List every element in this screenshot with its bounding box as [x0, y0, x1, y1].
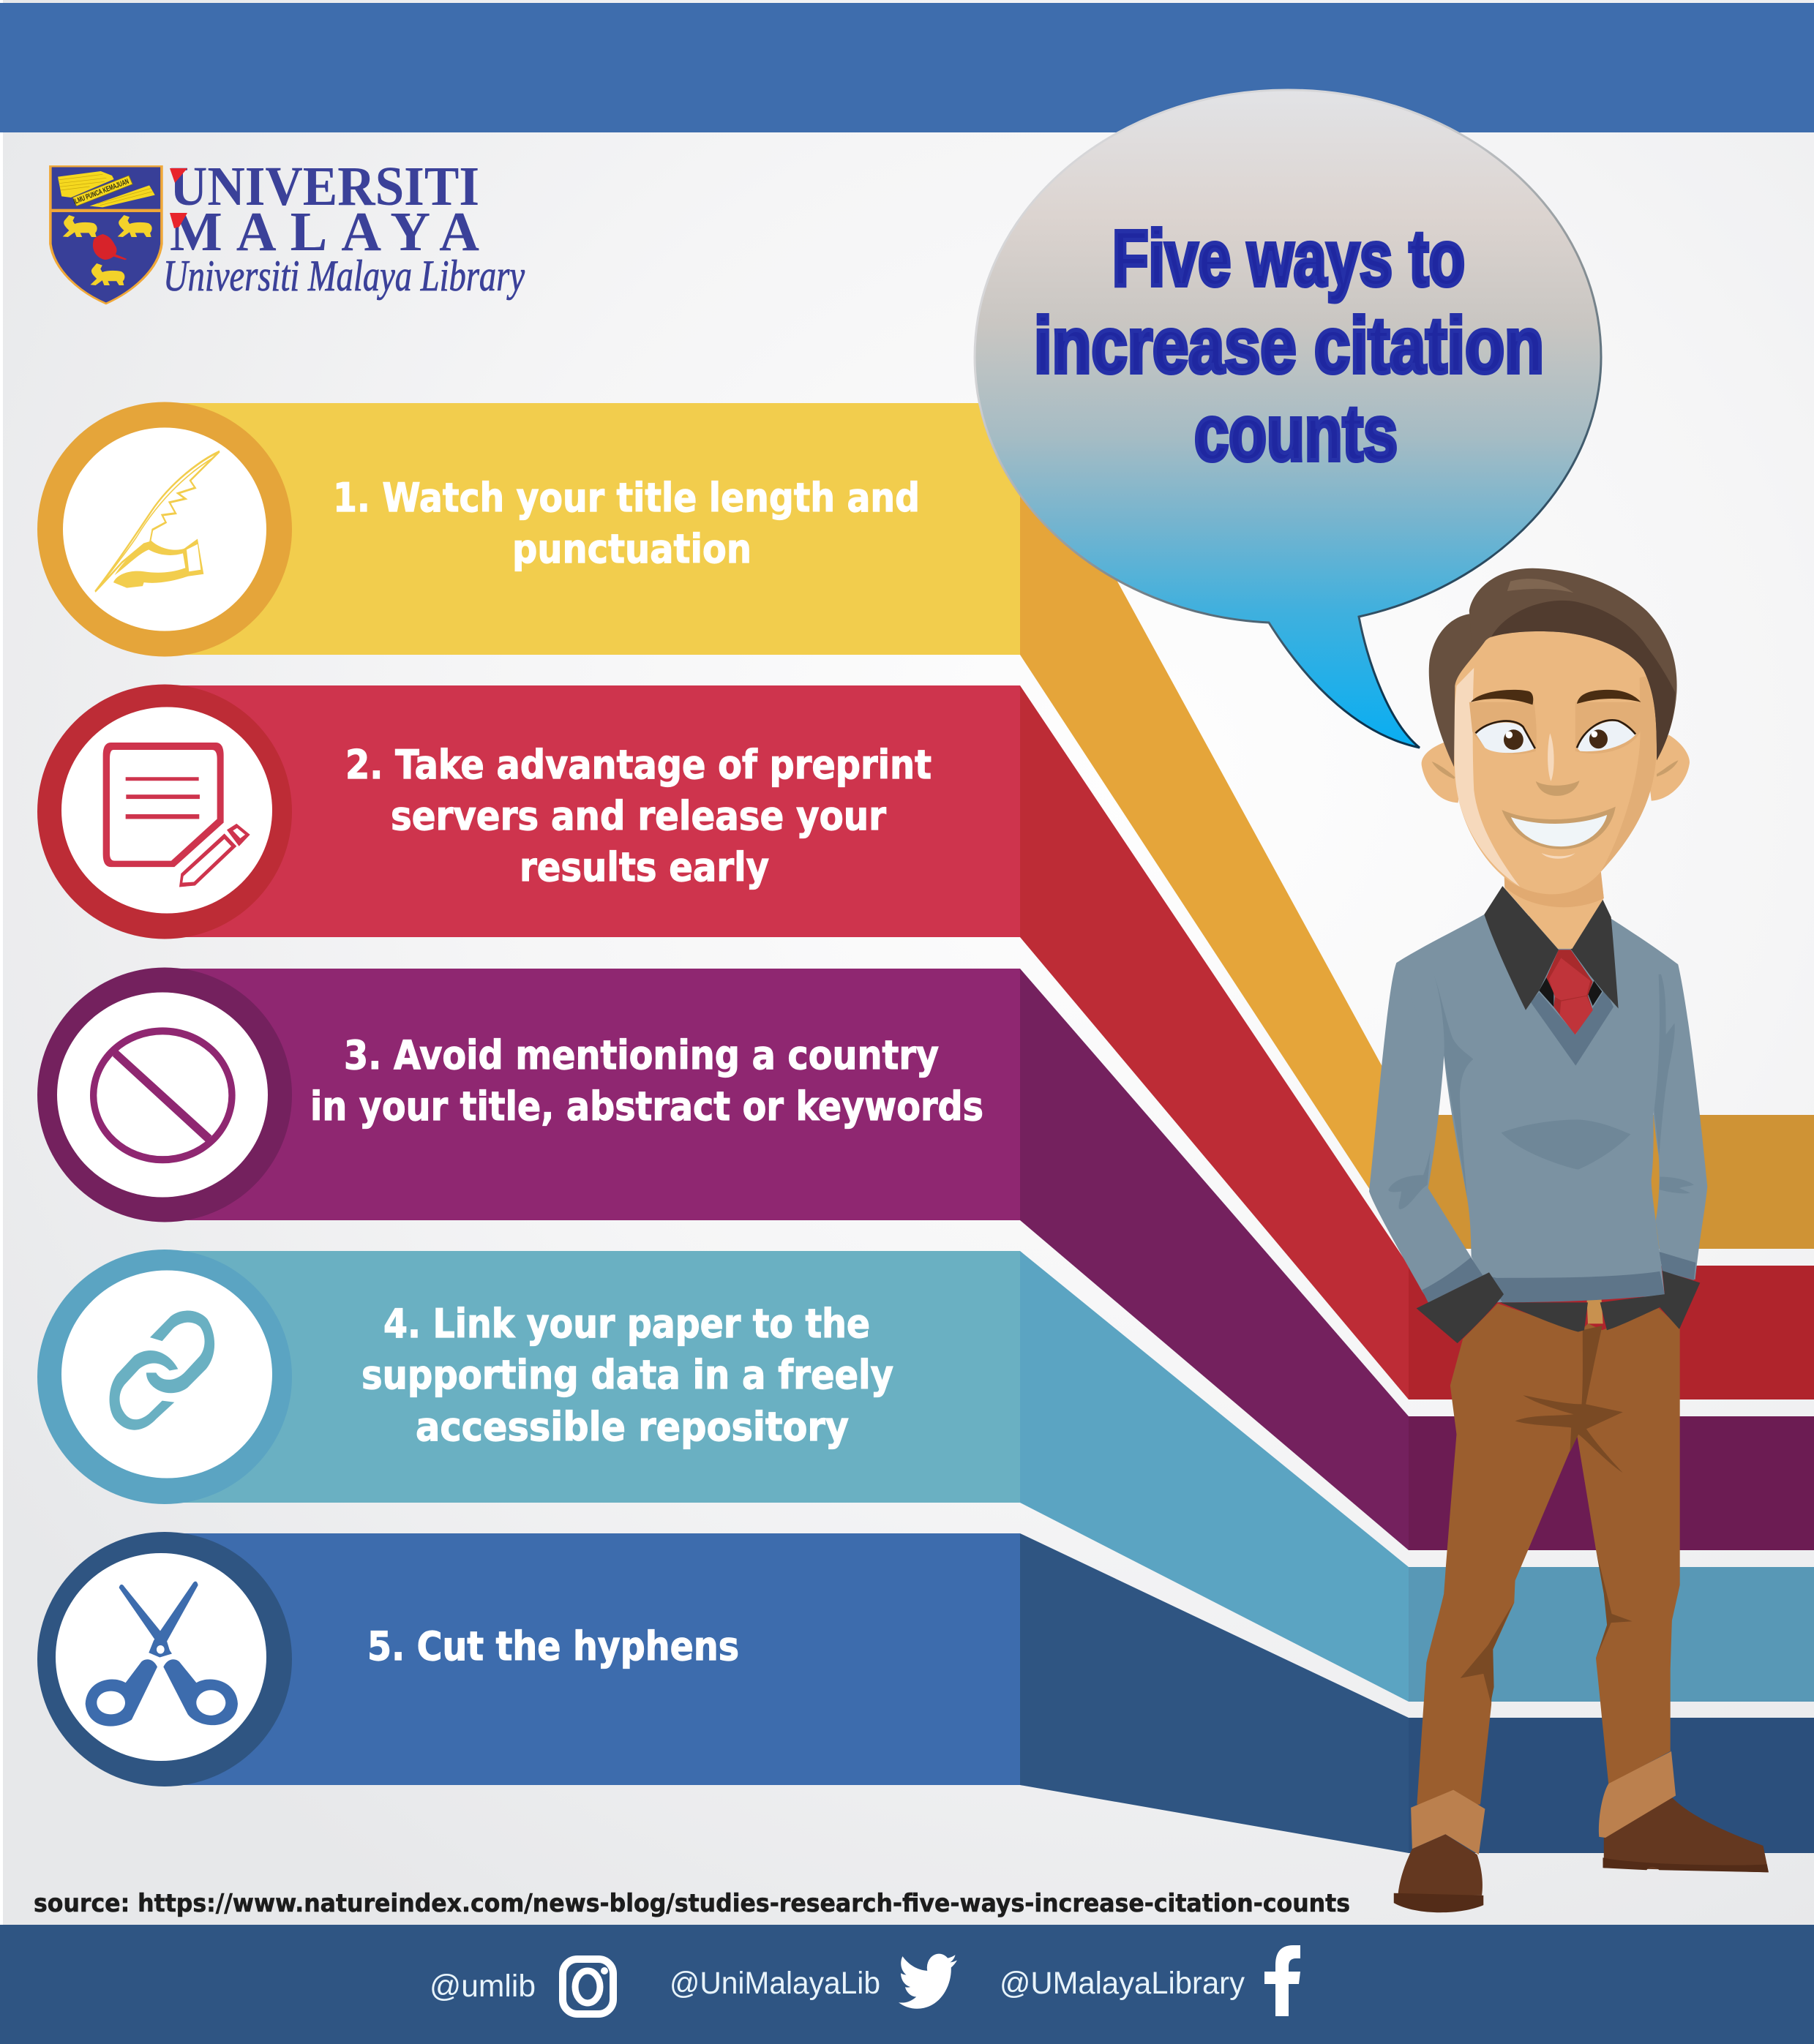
ribbon: navy	[1020, 1533, 1814, 1853]
title: counts	[1194, 388, 1398, 477]
step 2 text: results early	[520, 844, 769, 890]
head	[1422, 568, 1690, 949]
step 1 text: 1. Watch your title length and	[333, 475, 920, 521]
icon: prohibition sign	[90, 1027, 236, 1163]
icon ring 4	[37, 1250, 292, 1504]
icon: chain link	[110, 1311, 214, 1430]
bar 3	[165, 969, 1020, 1220]
step 2 text	[345, 742, 932, 890]
ribbon: red	[1020, 685, 1814, 1399]
step 4 text	[361, 1301, 893, 1450]
icon: quill and hand	[95, 451, 220, 592]
icon: instagram	[563, 1959, 613, 2014]
handle: twitter: @UniMalayaLib	[670, 1966, 880, 2001]
icon: scissors	[86, 1582, 238, 1726]
wordmark MALAYA: MALAYA	[170, 201, 479, 263]
bar 4	[165, 1251, 1020, 1503]
title: increase citation	[1034, 301, 1544, 389]
footer social handles	[430, 1945, 1300, 2016]
step 1 text: punctuation	[512, 526, 752, 572]
step 3 text: in your title, abstract or keywords	[310, 1083, 983, 1130]
panel: step 3	[37, 967, 1020, 1222]
wordmark UNIVERSITI: UNIVERSITI	[170, 156, 479, 217]
footer band background	[0, 1925, 1814, 2044]
panel: step 2	[37, 685, 1020, 939]
bar 2	[165, 685, 1020, 937]
icon: facebook f	[1264, 1945, 1300, 2016]
bar 5	[165, 1533, 1020, 1785]
speech bubble with title	[975, 90, 1601, 748]
icon ring 5	[37, 1532, 292, 1786]
ribbon: teal	[1020, 1251, 1814, 1702]
source line: source: https://www.natureindex.com/news-blog/studies-research-five-ways-increase-citation-counts	[34, 1889, 1350, 1918]
step 2 text: 2. Take advantage of preprint	[345, 742, 932, 788]
icon: document and pencil	[103, 743, 250, 887]
panel: step 5	[37, 1532, 1020, 1786]
step 3 text	[310, 1032, 983, 1130]
shield motto: ILMU PUNCA KEMAJUAN	[72, 178, 130, 206]
icon ring 1	[37, 402, 292, 657]
header band	[0, 3, 1814, 132]
step 2 text: servers and release your	[391, 793, 886, 839]
trousers and shoes	[1394, 1304, 1769, 1912]
panel: step 1	[37, 402, 1020, 657]
bubble shape	[975, 90, 1601, 748]
character: smiling man	[1369, 568, 1769, 1912]
icon ring 2	[37, 685, 292, 939]
ribbon: purple	[1020, 969, 1814, 1550]
icon: twitter bird	[899, 1954, 957, 2009]
bar 1	[165, 403, 1020, 655]
ribbon: gold	[1020, 403, 1814, 1249]
handle: instagram: @umlib	[430, 1969, 536, 2004]
icon ring 3	[37, 967, 292, 1222]
step 5 text: 5. Cut the hyphens	[367, 1623, 739, 1669]
step 4 text: 4. Link your paper to the	[383, 1301, 870, 1347]
handle: facebook: @UMalayaLibrary	[1000, 1966, 1245, 2001]
title	[1034, 214, 1544, 477]
panel: step 4	[37, 1250, 1020, 1504]
red accents on logo letters	[170, 168, 187, 228]
step 4 text: supporting data in a freely	[361, 1352, 893, 1398]
icon: university shield	[50, 166, 162, 304]
step 3 text: 3. Avoid mentioning a country	[344, 1032, 939, 1078]
step 4 text: accessible repository	[416, 1404, 849, 1450]
script line: Universiti Malaya Library: Universiti Malaya Library	[163, 252, 525, 300]
step 1 text	[333, 475, 920, 572]
title: Five ways to	[1112, 214, 1465, 302]
sweater, collar and tie	[1369, 886, 1707, 1343]
logo: Universiti Malaya Library	[50, 156, 525, 304]
